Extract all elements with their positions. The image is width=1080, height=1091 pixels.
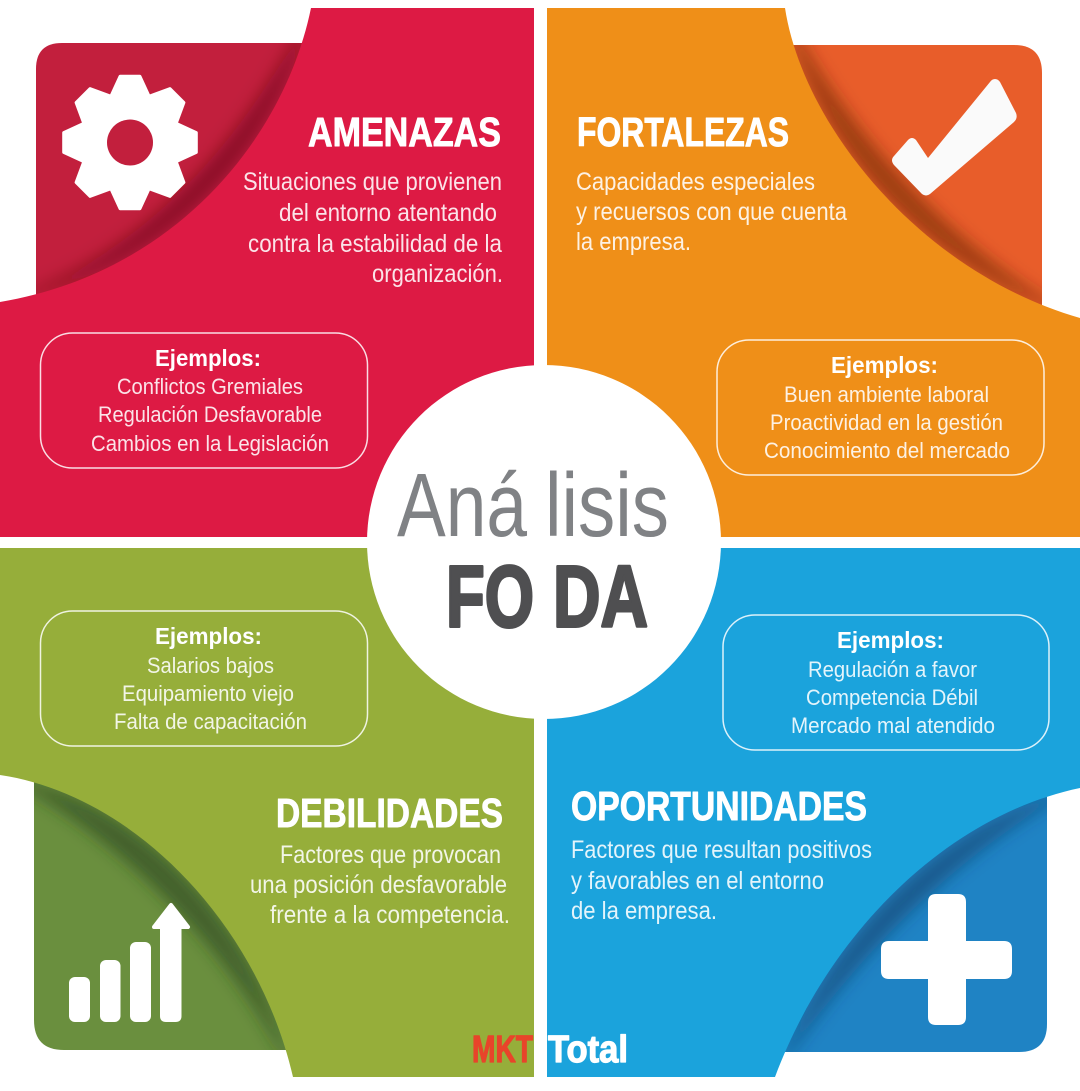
icon: rising bars and arrow xyxy=(69,905,188,1022)
examples: amenazas xyxy=(40,333,368,468)
description: oportunidades: de la empresa. xyxy=(571,897,717,925)
examples: oportunidades: Competencia Débil xyxy=(806,685,978,710)
icon: plus xyxy=(881,894,1012,1025)
examples: fortalezas: Ejemplos: xyxy=(831,352,938,378)
panel: oportunidades xyxy=(547,548,1080,1077)
description: amenazas: organización. xyxy=(372,260,503,288)
dark tab: oportunidades xyxy=(785,796,1047,1052)
icon: gear xyxy=(64,76,196,209)
examples: fortalezas: Buen ambiente laboral xyxy=(784,382,989,407)
title line: FODA: DA xyxy=(553,548,648,646)
description: amenazas xyxy=(243,168,503,288)
examples: fortalezas xyxy=(717,340,1044,475)
panel: amenazas xyxy=(0,8,534,537)
examples: oportunidades: Mercado mal atendido xyxy=(791,713,995,738)
heading: oportunidades: OPORTUNIDADES xyxy=(571,783,867,829)
heading: debilidades: DEBILIDADES xyxy=(276,790,503,836)
logo: MKT Total: Total xyxy=(548,1029,628,1071)
description: debilidades: Factores que provocan xyxy=(280,841,501,869)
main shape: amenazas xyxy=(0,8,534,537)
dark tab: fortalezas xyxy=(794,45,1042,305)
examples: fortalezas: Conocimiento del mercado xyxy=(764,438,1010,463)
title line: Análisis: lisis xyxy=(545,456,669,556)
examples: fortalezas: Proactividad en la gestión xyxy=(770,410,1003,435)
examples: debilidades: Falta de capacitación xyxy=(114,709,307,734)
description: debilidades: una posición desfavorable xyxy=(250,871,507,899)
description: oportunidades xyxy=(571,836,872,925)
description: oportunidades: y favorables en el entorno xyxy=(571,867,824,895)
description: debilidades xyxy=(250,841,510,929)
dark tab: amenazas xyxy=(36,43,302,294)
description: oportunidades: Factores que resultan positivos xyxy=(571,836,872,864)
examples: oportunidades xyxy=(723,615,1049,750)
title line: Análisis xyxy=(397,456,669,556)
logo: MKT Total: MKT xyxy=(472,1029,533,1071)
description: amenazas: del entorno atentando xyxy=(279,199,497,227)
description: fortalezas xyxy=(576,168,847,256)
examples: amenazas: Cambios en la Legislación xyxy=(91,431,329,456)
description: amenazas: contra la estabilidad de la xyxy=(248,230,502,258)
panel: fortalezas xyxy=(547,8,1080,537)
examples: amenazas: Regulación Desfavorable xyxy=(98,402,322,427)
title line: FODA xyxy=(446,548,648,646)
heading: fortalezas: FORTALEZAS xyxy=(577,109,789,155)
description: debilidades: frente a la competencia. xyxy=(270,901,510,929)
examples: debilidades xyxy=(40,611,368,746)
main shape: oportunidades xyxy=(547,548,1080,1077)
icon: check mark xyxy=(892,79,1017,196)
title line: Análisis: Aná xyxy=(397,456,528,556)
examples: oportunidades: Regulación a favor xyxy=(808,657,977,682)
examples: amenazas: Conflictos Gremiales xyxy=(117,374,303,399)
panel: debilidades xyxy=(0,548,534,1077)
title line: FODA: FO xyxy=(446,548,534,646)
examples: debilidades: Ejemplos: xyxy=(155,623,262,649)
dark tab: debilidades xyxy=(34,782,286,1050)
description: fortalezas: Capacidades especiales xyxy=(576,168,815,196)
description: fortalezas: y recuersos con que cuenta xyxy=(576,198,847,226)
examples: oportunidades: Ejemplos: xyxy=(837,627,944,653)
heading: amenazas: AMENAZAS xyxy=(308,109,501,155)
description: amenazas: Situaciones que provienen xyxy=(243,168,502,196)
description: fortalezas: la empresa. xyxy=(576,228,691,256)
main shape: fortalezas xyxy=(547,8,1080,537)
examples: debilidades: Equipamiento viejo xyxy=(122,681,294,706)
main shape: debilidades xyxy=(0,548,534,1077)
center circle: title xyxy=(367,365,721,719)
logo: MKT Total xyxy=(472,1029,628,1071)
examples: debilidades: Salarios bajos xyxy=(147,653,274,678)
examples: amenazas: Ejemplos: xyxy=(155,345,261,371)
